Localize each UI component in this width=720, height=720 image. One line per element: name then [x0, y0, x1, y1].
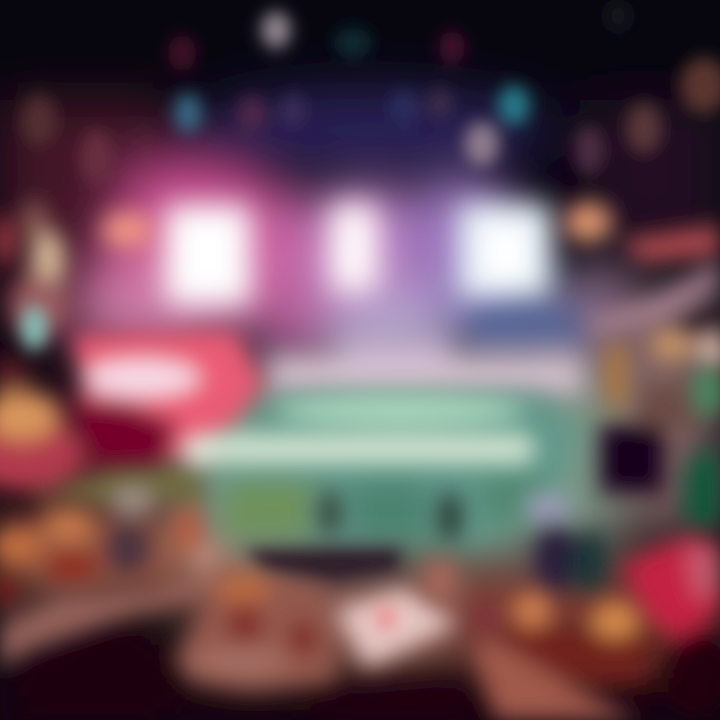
playing card	[335, 588, 458, 668]
left red table	[72, 330, 265, 462]
bottom chips: left group	[0, 486, 232, 670]
bottom chips: centre group	[175, 574, 335, 690]
right objects	[523, 329, 720, 720]
teal lamp near left wall	[21, 306, 47, 350]
left wall lamps	[0, 200, 154, 335]
green bottle	[684, 366, 720, 528]
ceiling lights	[21, 0, 720, 185]
players silhouettes	[318, 489, 463, 543]
red box	[622, 535, 720, 720]
card pip	[377, 605, 395, 631]
center green gaming table	[183, 394, 578, 545]
dark drink glass	[600, 329, 720, 493]
stage glow: magenta, violet and blue halos	[65, 150, 635, 370]
left stool with chips	[0, 357, 83, 491]
green felt	[210, 395, 578, 545]
bottom shadow	[0, 615, 490, 720]
dark table base	[245, 548, 402, 582]
dark chip stack	[523, 495, 610, 594]
right side: amber lamp, red rail, grey rail	[564, 202, 720, 335]
bright felt band	[183, 394, 535, 466]
green floor strip at left	[0, 468, 210, 515]
stage screens: three bright panels	[165, 202, 552, 305]
audience band behind table	[265, 315, 585, 397]
bottom chips: right group	[422, 558, 650, 720]
